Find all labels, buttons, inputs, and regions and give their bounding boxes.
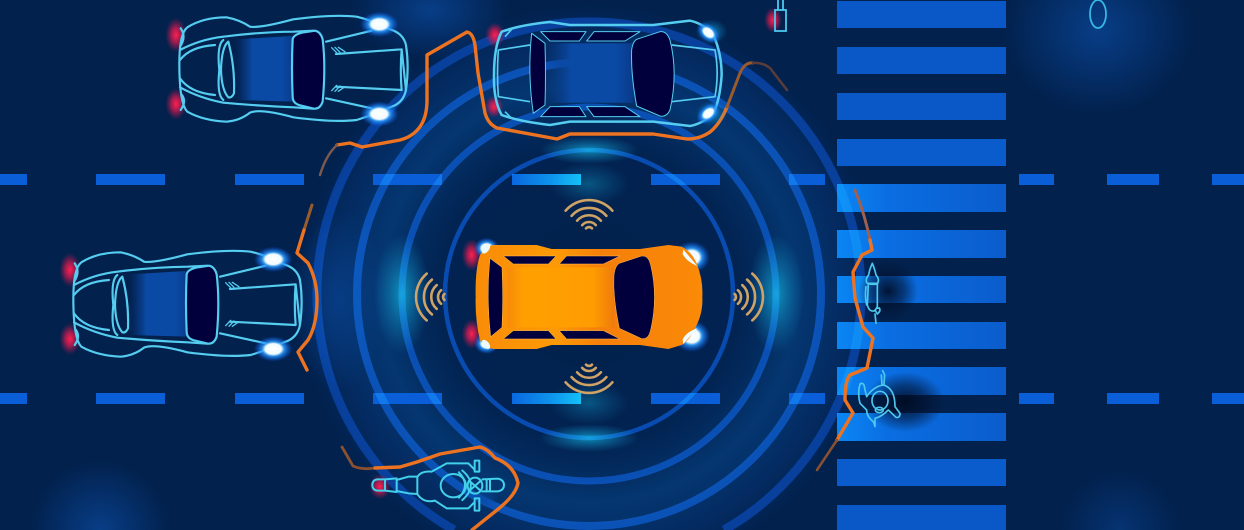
crosswalk: [837, 1, 1006, 530]
orange self-driving car: [462, 238, 710, 354]
sports car top left: [165, 12, 408, 127]
pedestrian with phone: [865, 263, 880, 323]
signal left: [416, 274, 444, 320]
road dashes: [0, 174, 1244, 404]
person walking with stroller: [859, 371, 900, 427]
pedestrian shadows: [858, 261, 945, 432]
orange detection outline: [297, 32, 873, 530]
sedan outline top: [485, 17, 728, 129]
signal bottom: [566, 365, 612, 393]
signal top: [566, 200, 612, 228]
wifi sensor signals: [416, 200, 763, 393]
signal right: [735, 274, 763, 320]
motorcycle: [369, 461, 504, 511]
traffic light: [764, 0, 786, 33]
signal lamp top right: [1090, 0, 1106, 28]
radar rings: [317, 22, 861, 530]
ring glows: [374, 136, 804, 452]
sports car left: [59, 247, 302, 362]
radar glow: [299, 4, 879, 530]
